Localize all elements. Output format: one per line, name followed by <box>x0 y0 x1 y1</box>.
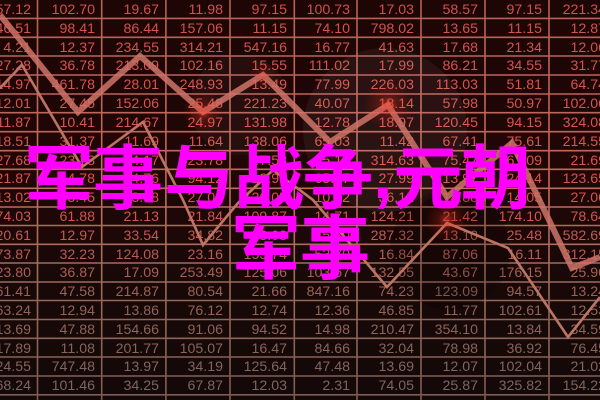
column 6: 84.66 <box>314 341 350 357</box>
column 8: 14.88 <box>442 190 478 206</box>
column 3: 86.44 <box>123 21 159 37</box>
column 10 <box>542 1 600 400</box>
title line 2 <box>231 193 370 294</box>
column 8: 58.57 <box>442 2 478 18</box>
column 2 <box>31 1 95 400</box>
column 3: 201.77 <box>116 341 159 357</box>
column 7: 13.69 <box>378 359 414 375</box>
title line 1: 战 <box>234 123 304 224</box>
title line 1: 与 <box>164 123 234 224</box>
column 6: 65.03 <box>314 134 350 150</box>
column 8: 11.77 <box>444 303 478 319</box>
column 4: 91.06 <box>187 322 223 338</box>
column 3: 33.54 <box>123 228 159 244</box>
column 8: 12.07 <box>442 359 478 375</box>
column 5: 547.16 <box>244 40 287 56</box>
column 7: 18.14 <box>378 96 414 112</box>
title line 1: , <box>373 135 392 213</box>
column 7: 74.23 <box>378 284 414 300</box>
column 1 <box>0 1 31 400</box>
column 4: 253.49 <box>180 265 223 281</box>
column 6: 103.67 <box>307 265 350 281</box>
column 1: 4.21 <box>3 40 31 56</box>
column 3: 19.67 <box>123 2 159 18</box>
column 5: 125.06 <box>244 265 287 281</box>
column 6: 111.02 <box>309 58 350 74</box>
column 3: 152.06 <box>116 96 159 112</box>
column 6: 45.30 <box>314 228 350 244</box>
column 9: 25.48 <box>506 228 542 244</box>
column 3: 53.38 <box>123 190 159 206</box>
column 2: 31.37 <box>59 134 95 150</box>
column 7: 17.99 <box>378 58 414 74</box>
column 3: 21.13 <box>123 209 159 225</box>
column 4: 80.54 <box>187 284 223 300</box>
column 9: 24.14 <box>506 171 542 187</box>
column 5: 12.74 <box>251 303 287 319</box>
column 8 <box>414 1 478 400</box>
column 8: 354.10 <box>435 322 478 338</box>
column 2: 101.46 <box>52 378 95 394</box>
column 7: 210.47 <box>371 322 414 338</box>
column 5: 109.87 <box>244 209 287 225</box>
column 5: 97.15 <box>251 2 287 18</box>
column 8: 25.87 <box>442 378 478 394</box>
column 4: 34.19 <box>187 359 223 375</box>
column 5: 23.08 <box>251 228 287 244</box>
column 4: 105.07 <box>180 341 223 357</box>
title line 1 <box>24 123 531 224</box>
column 2: 65.45 <box>59 190 95 206</box>
column 8: 87.06 <box>442 247 478 263</box>
column 4: 23.16 <box>187 247 223 263</box>
column 4: 248.93 <box>180 77 223 93</box>
column 5: 221.23 <box>244 96 287 112</box>
column 6: 12.36 <box>314 303 350 319</box>
column 3: 214.67 <box>116 115 159 131</box>
column 5 <box>223 1 287 400</box>
column 9: 94.15 <box>506 115 542 131</box>
column 3 <box>95 1 159 400</box>
column 8: 120.45 <box>435 115 478 131</box>
column 9: 97.15 <box>506 2 542 18</box>
column 9: 21.34 <box>506 40 542 56</box>
column 6: 74.10 <box>314 21 350 37</box>
column 3: 213.09 <box>116 58 159 74</box>
upper thick line <box>0 15 600 268</box>
column 5: 11.15 <box>253 21 287 37</box>
column 2: 14.78 <box>59 171 95 187</box>
column 5: 131.98 <box>244 115 287 131</box>
column 6: 2.31 <box>322 378 350 394</box>
column 7 <box>350 1 414 400</box>
column 4: 11.98 <box>189 2 223 18</box>
column 5: 21.66 <box>251 284 287 300</box>
column 2: 27.45 <box>59 96 95 112</box>
title line 1: 事 <box>93 123 163 224</box>
column 7: 41.63 <box>378 40 414 56</box>
column 8: 75.47 <box>442 152 478 168</box>
column 8: 13.65 <box>442 21 478 37</box>
column 4: 27.09 <box>187 190 223 206</box>
column 6: 47.48 <box>314 359 350 375</box>
column 8: 43.67 <box>442 265 478 281</box>
column 7: 314.63 <box>371 152 414 168</box>
column 6: 65.27 <box>314 171 350 187</box>
column 6: 16.77 <box>314 40 350 56</box>
column 6: 77.99 <box>314 77 350 93</box>
title line 2: 事 <box>300 193 370 294</box>
column 8: 86.21 <box>442 58 478 74</box>
column 5: 153.74 <box>244 247 287 263</box>
column 3: 124.08 <box>116 247 159 263</box>
column 5: 125.64 <box>244 359 287 375</box>
column 5: 47.58 <box>251 152 287 168</box>
column 9: 36.92 <box>506 341 542 357</box>
column 4: 21.84 <box>187 209 223 225</box>
column 7: 46.85 <box>378 303 414 319</box>
column 4: 23.78 <box>187 152 223 168</box>
column 9: 75.61 <box>506 134 542 150</box>
column 7: 124.21 <box>371 209 414 225</box>
column 9: 174.10 <box>499 209 542 225</box>
column 4: 25.48 <box>187 96 223 112</box>
column 9: 176.15 <box>499 265 542 281</box>
column 9: 61.09 <box>506 152 542 168</box>
column 5: 15.55 <box>251 58 287 74</box>
column 5: 13.49 <box>251 77 287 93</box>
column 8: 67.41 <box>442 134 478 150</box>
column 5: 138.06 <box>244 134 287 150</box>
column 4: 11.64 <box>189 134 223 150</box>
column 6: 14.98 <box>314 322 350 338</box>
column 7: 132.55 <box>371 265 414 281</box>
column 8: 13.10 <box>442 228 478 244</box>
column 5: 16.47 <box>251 341 287 357</box>
column 3: 28.01 <box>123 77 159 93</box>
column 7: 11.42 <box>380 134 414 150</box>
column 2: 12.37 <box>59 40 95 56</box>
column 7: 287.32 <box>371 228 414 244</box>
column 8: 78.98 <box>442 341 478 357</box>
column 2: 47.88 <box>59 322 95 338</box>
column 6: 10.32 <box>314 190 350 206</box>
column 3: 13.97 <box>123 359 159 375</box>
column 9: 50.97 <box>506 96 542 112</box>
column 4: 67.87 <box>187 378 223 394</box>
column 5: 94.52 <box>251 322 287 338</box>
column 3: 34.76 <box>123 171 159 187</box>
column 8: 21.42 <box>442 209 478 225</box>
column 4: 94.12 <box>187 171 223 187</box>
lower thin line <box>0 65 600 337</box>
column 6: 40.07 <box>314 96 350 112</box>
column 9: 102.04 <box>499 359 542 375</box>
column 5: 126.05 <box>244 190 287 206</box>
title line 2: 军 <box>231 193 301 294</box>
column 4: 24.97 <box>187 115 223 131</box>
title line 1: 元 <box>393 123 463 224</box>
column 2: 47.58 <box>59 284 95 300</box>
column 6: 53.70 <box>314 247 350 263</box>
column 7: 36.12 <box>378 190 414 206</box>
column 4: 314.21 <box>180 40 223 56</box>
column 2: 461.78 <box>52 77 95 93</box>
column 9: 16.11 <box>508 247 542 263</box>
column 2: 12.94 <box>59 303 95 319</box>
column 7: 17.03 <box>378 2 414 18</box>
column 7: 798.02 <box>371 21 414 37</box>
column 7: 226.03 <box>371 77 414 93</box>
column 9: 13.84 <box>506 322 542 338</box>
column 2: 61.88 <box>59 209 95 225</box>
glow spots <box>183 61 469 242</box>
column 9: 34.55 <box>506 58 542 74</box>
column 3: 214.87 <box>116 284 159 300</box>
column 2: 98.41 <box>59 21 95 37</box>
column 5: 12.93 <box>251 171 287 187</box>
column 9: 51.81 <box>506 77 542 93</box>
column 3: 154.66 <box>116 322 159 338</box>
column 7: 74.05 <box>378 378 414 394</box>
column 3: 11.69 <box>125 134 159 150</box>
column 2: 12.97 <box>59 228 95 244</box>
column 8: 17.68 <box>442 40 478 56</box>
column 2: 10.41 <box>59 115 95 131</box>
column 7: 16.84 <box>378 247 414 263</box>
title line 1: 争 <box>303 123 373 224</box>
column 4: 102.16 <box>180 58 223 74</box>
column 9: 94.57 <box>506 284 542 300</box>
column 4: 76.12 <box>187 303 223 319</box>
column 6: 45.19 <box>314 152 350 168</box>
title line 1: 朝 <box>461 123 531 224</box>
column 9 <box>478 1 542 400</box>
column 3: 24.17 <box>123 152 159 168</box>
column 8: 113.03 <box>436 77 478 93</box>
column 2: 32.23 <box>59 247 95 263</box>
column 2: 11.08 <box>61 341 95 357</box>
column 8: 13.97 <box>442 171 478 187</box>
column 7: 18.97 <box>378 115 414 131</box>
column 6: 12.78 <box>314 115 350 131</box>
column 9: 102.61 <box>499 303 542 319</box>
column 9: 14.05 <box>506 190 542 206</box>
column 6: 14.71 <box>314 209 350 225</box>
column 2: 747.48 <box>52 359 95 375</box>
column 4: 157.06 <box>180 21 223 37</box>
column 8: 57.98 <box>442 96 478 112</box>
column 6: 847.16 <box>307 284 350 300</box>
column 4: 34.82 <box>187 228 223 244</box>
column 3: 13.86 <box>123 303 159 319</box>
column 3: 34.25 <box>123 378 159 394</box>
column 6 <box>286 1 350 400</box>
column 3: 17.09 <box>123 265 159 281</box>
column 9: 11.15 <box>508 21 542 37</box>
column 9: 325.82 <box>499 378 542 394</box>
column 3: 234.55 <box>116 40 159 56</box>
column 2: 36.87 <box>59 265 95 281</box>
column 2: 36.78 <box>59 58 95 74</box>
title line 1: 军 <box>24 123 94 224</box>
translucent circles <box>190 48 510 310</box>
column 2: 23.78 <box>59 152 95 168</box>
column 5: 12.03 <box>251 378 287 394</box>
column 4 <box>159 1 223 400</box>
column 8: 123.09 <box>435 284 478 300</box>
column 6: 100.73 <box>307 2 350 18</box>
column 2: 102.70 <box>52 2 95 18</box>
column 7: 27.99 <box>378 171 414 187</box>
column 7: 32.04 <box>378 341 414 357</box>
